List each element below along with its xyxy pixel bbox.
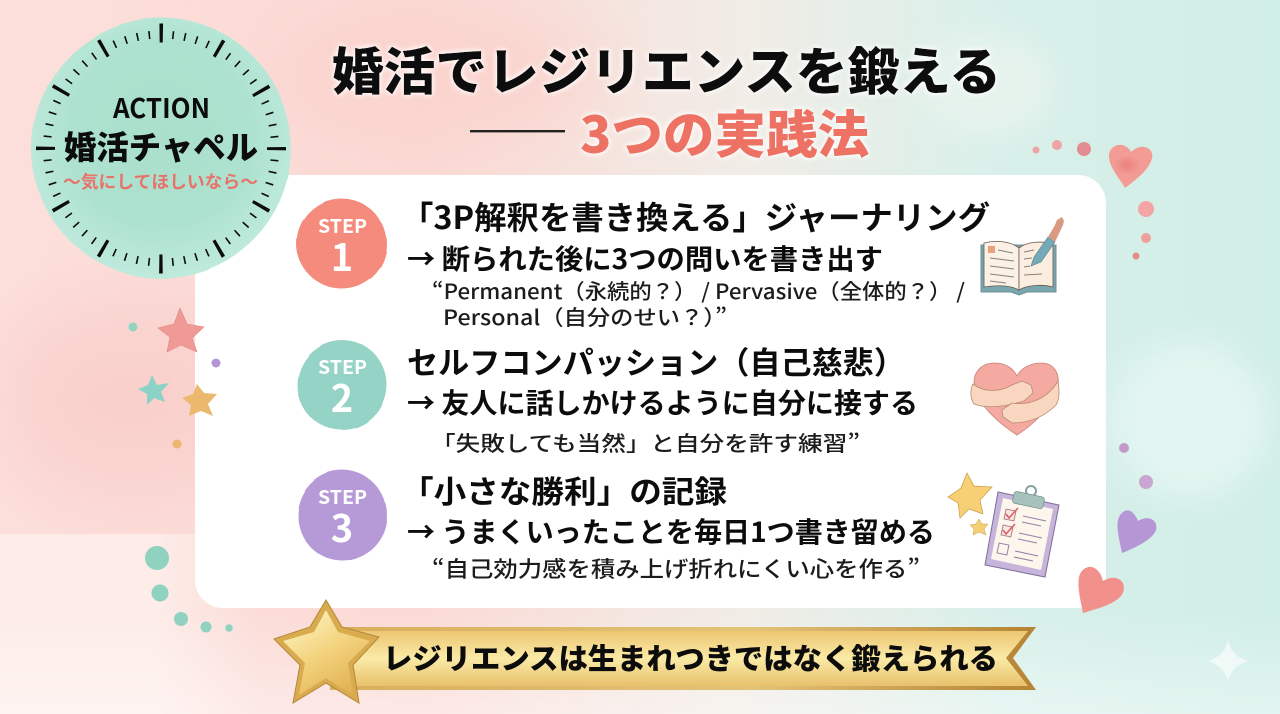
step 1 quote xyxy=(432,276,965,332)
step 2 quote: 「失敗しても当然」と自分を許す練習” xyxy=(431,428,860,458)
step 3 badge: 3 xyxy=(331,498,353,553)
step 1 quote: Personal（自分のせい？）” xyxy=(443,302,727,332)
step 3 action: → うまくいったことを毎日1つ書き留める xyxy=(407,511,935,551)
icon: heart hug xyxy=(971,363,1059,435)
decorative hearts and dots: lower right xyxy=(1078,443,1156,613)
subtitle: 3つの実践法: 3つの実践法 xyxy=(580,94,869,168)
step 1 action: → 断られた後に3つの問いを書き出す xyxy=(407,238,883,278)
decorative dots: lower left xyxy=(145,546,233,632)
step 2 xyxy=(297,338,1059,458)
gold star xyxy=(274,600,379,703)
step 1 badge xyxy=(297,199,387,289)
clock ticks xyxy=(46,33,276,264)
ribbon body xyxy=(330,627,1036,690)
icon: open book with pen xyxy=(981,217,1064,295)
ribbon banner xyxy=(274,600,1036,703)
step 1 badge: 1 xyxy=(331,227,353,282)
step 2 badge xyxy=(297,340,387,430)
step 3 badge: STEP xyxy=(318,483,367,510)
step 2 badge: 2 xyxy=(331,368,353,423)
badge label: 婚活チャペル: 婚活チャペル xyxy=(64,122,258,169)
step 3 badge xyxy=(297,470,387,560)
title: 婚活でレジリエンスを鍛える xyxy=(332,31,1001,105)
step 3 quote: “自己効力感を積み上げ折れにくい心を作る” xyxy=(432,552,920,584)
step 1 heading: 「3P解釈を書き換える」ジャーナリング xyxy=(401,193,990,239)
white content panel xyxy=(195,175,1106,608)
step 1 xyxy=(297,193,1064,332)
step 2 badge: STEP xyxy=(318,353,367,380)
step 2 heading: セルフコンパッション（自己慈悲） xyxy=(407,338,905,383)
badge subtitle: ～気にしてほしいなら～ xyxy=(63,169,258,194)
clock badge xyxy=(31,18,291,278)
decorative hearts and dots: top right xyxy=(1032,140,1154,260)
badge disc xyxy=(31,18,291,278)
step 3 xyxy=(297,467,1059,584)
banner message: レジリエンスは生まれつきではなく鍛えられる xyxy=(383,636,998,678)
step 1 badge: STEP xyxy=(318,212,367,239)
step 2 action: → 友人に話しかけるように自分に接する xyxy=(407,382,918,422)
step 1 quote: “Permanent（永続的？） / Pervasive（全体的？） / xyxy=(432,276,965,306)
badge label: ACTION: ACTION xyxy=(112,87,210,126)
sparkle xyxy=(1207,640,1249,682)
step 3 heading: 「小さな勝利」の記録 xyxy=(401,467,727,512)
icon: clipboard with stars xyxy=(948,473,1059,577)
decorative stars: left xyxy=(128,308,220,448)
